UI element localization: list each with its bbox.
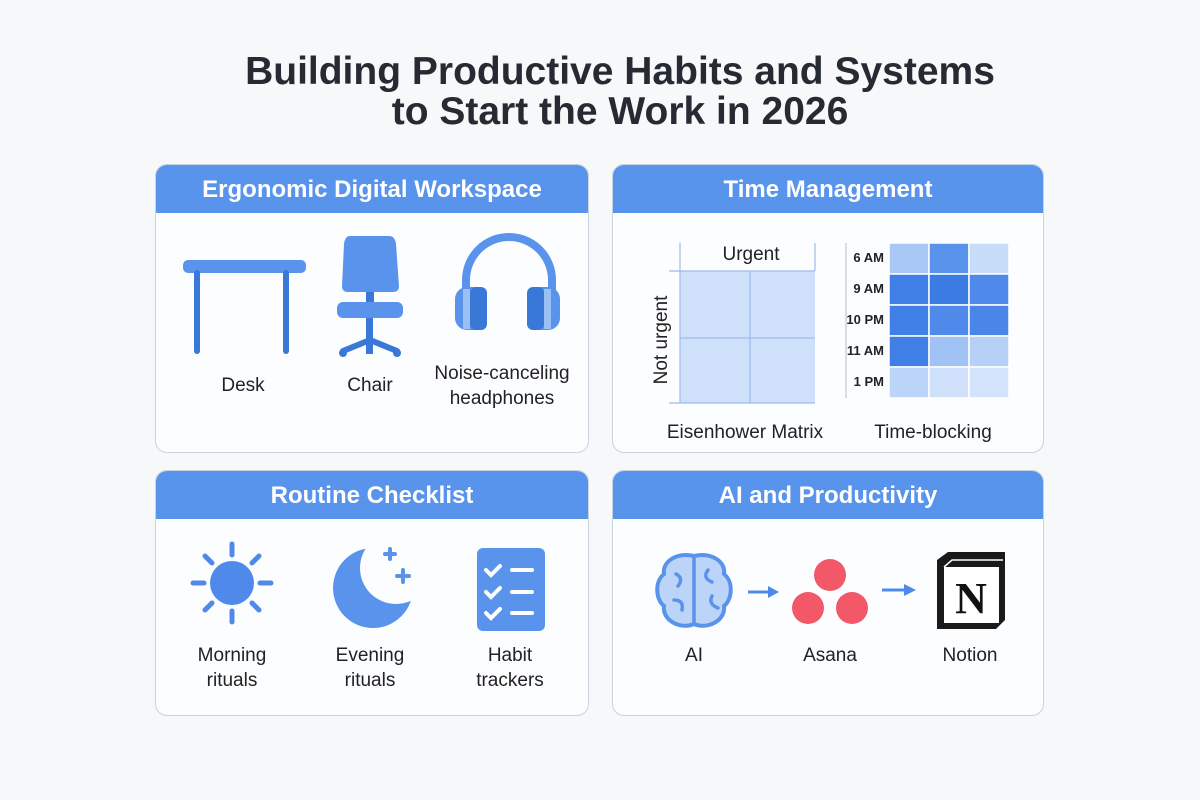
icon: habit tracker xyxy=(477,548,545,631)
label: habit trackers: trackers xyxy=(476,670,544,691)
chart: eisenhower matrix: Urgent xyxy=(722,244,780,265)
label: chair: Chair xyxy=(347,375,393,396)
label: habit trackers: Habit xyxy=(488,645,532,666)
icon: AI brain xyxy=(657,555,731,626)
label: asana: Asana xyxy=(803,645,857,666)
label: evening rituals xyxy=(336,645,404,691)
panel: time management: Time Management xyxy=(724,176,932,203)
label: morning rituals xyxy=(198,645,266,691)
icon: moon xyxy=(333,548,413,628)
label: morning rituals: Morning xyxy=(198,645,266,666)
panel: ergonomic workspace: Ergonomic Digital Workspace xyxy=(202,176,542,203)
label: habit trackers xyxy=(476,645,544,691)
panel: routine checklist xyxy=(155,470,589,716)
icon: headphones xyxy=(455,237,560,330)
label: time-blocking: Time-blocking xyxy=(874,422,992,443)
panel: AI and productivity xyxy=(612,470,1044,716)
title xyxy=(245,50,995,133)
icon: sun xyxy=(193,544,271,622)
label: eisenhower matrix: Eisenhower Matrix xyxy=(667,422,823,443)
chart: time-blocking grid: 1 PM xyxy=(854,374,884,389)
panel: ergonomic workspace xyxy=(155,164,589,453)
panel: routine checklist: Routine Checklist xyxy=(271,482,473,509)
arrow: AI to Asana xyxy=(748,586,779,598)
chart: time-blocking grid: 11 AM xyxy=(847,343,884,358)
label: desk: Desk xyxy=(221,375,265,396)
icon: notion: N xyxy=(955,574,987,623)
chart: time-blocking grid: 9 AM xyxy=(853,281,884,296)
label: headphones: headphones xyxy=(450,388,554,409)
chart: time-blocking grid: 6 AM xyxy=(853,250,884,265)
panel: time management xyxy=(612,164,1044,453)
label: morning rituals: rituals xyxy=(207,670,257,691)
icon: asana xyxy=(792,559,868,624)
label: evening rituals: Evening xyxy=(336,645,404,666)
label: headphones xyxy=(434,363,570,409)
chart: eisenhower matrix: Not urgent xyxy=(651,295,672,384)
title: Building Productive Habits and Systems xyxy=(245,50,995,93)
arrow: Asana to Notion xyxy=(882,584,916,596)
label: evening rituals: rituals xyxy=(345,670,395,691)
icon: chair xyxy=(337,236,403,357)
label: notion: Notion xyxy=(943,645,997,666)
label: AI: AI xyxy=(685,645,703,666)
icons svg xyxy=(183,233,1008,631)
chart: time-blocking grid xyxy=(846,243,1009,398)
title: to Start the Work in 2026 xyxy=(392,90,848,133)
chart: eisenhower matrix xyxy=(651,243,815,403)
icon: desk xyxy=(183,260,306,354)
icon: notion xyxy=(937,552,1005,629)
label: headphones: Noise-canceling xyxy=(434,363,570,384)
panel: AI and productivity: AI and Productivity xyxy=(719,482,937,509)
chart: time-blocking grid: 10 PM xyxy=(846,312,884,327)
